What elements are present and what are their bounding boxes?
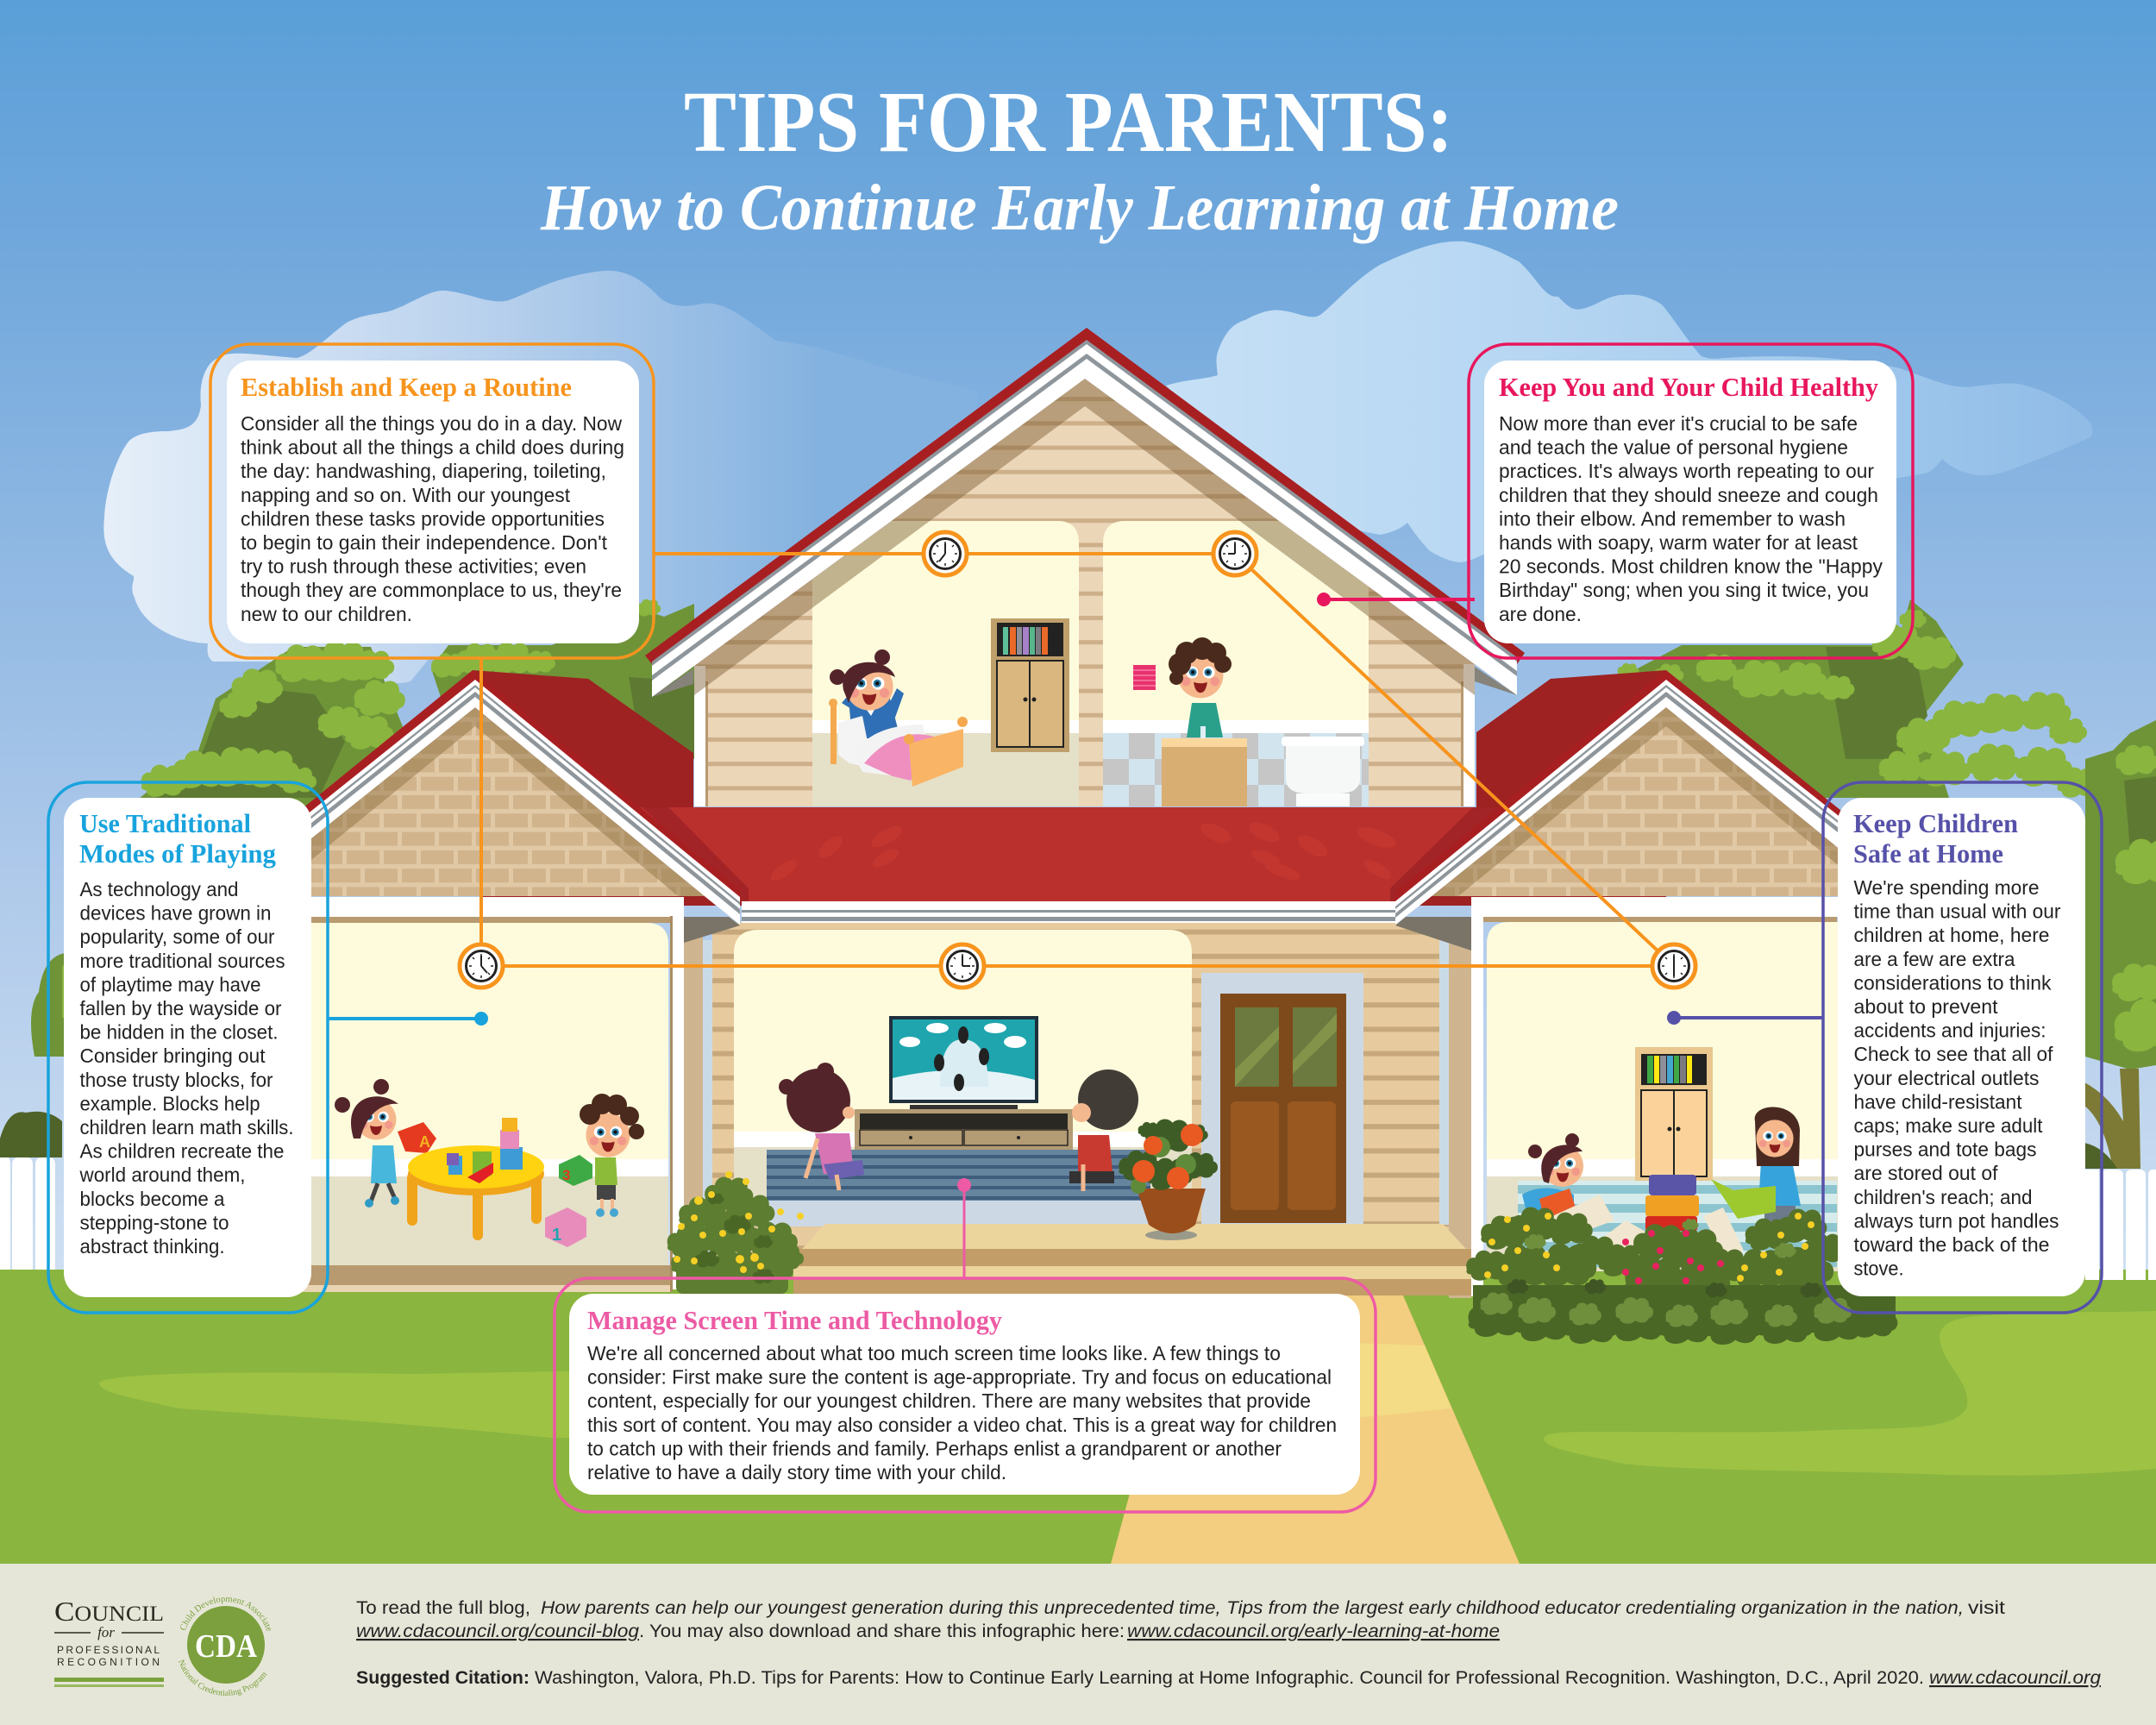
- block: letter A: A: [419, 1133, 430, 1151]
- cloud: left: [103, 271, 979, 690]
- footer text: blog reference: visit: [1968, 1597, 2005, 1618]
- block: number 1: 1: [552, 1226, 561, 1245]
- room: bedroom: [812, 521, 1079, 806]
- toilet: [1282, 737, 1364, 806]
- body text: and teach the value of personal hygiene: [1499, 436, 1848, 459]
- body text: are a few are extra: [1854, 948, 2015, 970]
- block: number 3: [559, 1155, 592, 1186]
- body text: considerations to think: [1854, 971, 2052, 994]
- body text: into their elbow. And remember to wash: [1499, 507, 1846, 530]
- body text: your electrical outlets: [1854, 1067, 2039, 1089]
- logo: CDA seal: [178, 1597, 271, 1696]
- central wall: [712, 923, 1471, 1272]
- reading room scene: [1522, 1047, 1801, 1264]
- logo: Council for Professional Recognition: for: [97, 1624, 115, 1640]
- sink cabinet: [1162, 738, 1247, 806]
- body text: world around them,: [79, 1164, 245, 1186]
- heading: Keep You and Your Child Healthy: [1499, 372, 1878, 402]
- body text: have child-resistant: [1854, 1090, 2022, 1113]
- gable shadows on the roof: [642, 807, 1501, 901]
- body text: children that they should sneeze and cough: [1499, 484, 1878, 506]
- logo: Council for Professional Recognition: RECOGNITION: [57, 1656, 160, 1668]
- logo: Council for Professional Recognition: COUNCIL: [54, 1596, 164, 1627]
- play table: [408, 1118, 544, 1235]
- body text: caps; make sure adult: [1854, 1114, 2043, 1137]
- body text: devices have grown in: [79, 902, 271, 925]
- boy with block: [559, 1094, 644, 1217]
- logo: Council for Professional Recognition: PROFESSIONAL: [57, 1644, 160, 1656]
- far left background trees: [0, 953, 86, 1157]
- clock 3: [460, 944, 503, 988]
- siding wall: [694, 379, 1475, 806]
- girl watching TV: [779, 1063, 864, 1190]
- body text: hands with soapy, warm water for at least: [1499, 531, 1858, 554]
- sky background: [0, 0, 2156, 1285]
- fence: [0, 1157, 2156, 1280]
- trees behind the house: [0, 599, 2156, 1331]
- panel: Manage Screen Time and Technology: [555, 1278, 1376, 1512]
- body text: We're all concerned about what too much screen time looks like. A few things to: [587, 1342, 1281, 1364]
- connector: safe: [1667, 1011, 1823, 1025]
- heading: Safe at Home: [1853, 838, 2003, 869]
- body text: As technology and: [79, 878, 238, 900]
- left tree one: [129, 641, 440, 837]
- body text: those trusty blocks, for: [79, 1069, 273, 1091]
- block: number 1: [545, 1208, 586, 1247]
- front door: [1220, 994, 1346, 1223]
- footer text: citation: www.cdacouncil.org: [1929, 1667, 2101, 1688]
- boy watching TV: [1069, 1070, 1138, 1191]
- room: bathroom: [1103, 521, 1369, 806]
- body text: though they are commonplace to us, they're: [241, 579, 622, 601]
- body text: [1854, 876, 2061, 1280]
- body text: about to prevent: [1854, 995, 1998, 1018]
- trunks: [248, 1276, 1902, 1331]
- right post: [1439, 927, 1449, 1225]
- panel: Establish and Keep a Routine: [210, 344, 654, 658]
- porch steps: [793, 1224, 1471, 1295]
- rug: [767, 1150, 1150, 1201]
- body text: to begin to gain their independence. Don't: [241, 531, 608, 554]
- right tree three: [2084, 720, 2156, 1169]
- heading: Keep Children: [1853, 808, 2018, 838]
- title: TIPS FOR PARENTS:: [684, 73, 1453, 170]
- heading: Establish and Keep a Routine: [241, 372, 572, 402]
- TV stand: [855, 1109, 1073, 1150]
- heading: [1853, 808, 2018, 869]
- roof trim: [1395, 670, 1863, 901]
- body text: [241, 412, 624, 625]
- right tree two: [1879, 692, 2100, 798]
- body text: 20 seconds. Most children know the "Happy: [1499, 555, 1883, 578]
- lawn highlights: [99, 1311, 2156, 1476]
- footer text: blog reference: www.cdacouncil.org/early-learning-at-home: [1127, 1621, 1500, 1641]
- body text: As children recreate the: [79, 1140, 285, 1163]
- block: number 3: 3: [562, 1167, 570, 1183]
- heading: [79, 808, 276, 869]
- panel: Keep You and Your Child Healthy: [1469, 344, 1913, 658]
- stack of books: [1645, 1175, 1699, 1231]
- body text: the day: handwashing, diapering, toileting,: [241, 460, 606, 482]
- ground floor: [302, 897, 1842, 1298]
- clock 5: [1652, 944, 1695, 988]
- panel: Use Traditional Modes of Playing: [48, 782, 328, 1313]
- body text: Now more than ever it's crucial to be safe: [1499, 412, 1858, 435]
- body text: consider: First make sure the content is age-appropriate. Try and focus on educational: [587, 1366, 1332, 1389]
- footer text: blog reference: . You may also download and share this infographic here:: [639, 1621, 1125, 1641]
- body text: [79, 878, 293, 1258]
- connector: routine clocks (orange): [460, 532, 1695, 988]
- body text: are done.: [1499, 603, 1582, 625]
- body text: purses and tote bags: [1854, 1138, 2037, 1161]
- body text: content, especially for our youngest children. There are many websites that provide: [587, 1389, 1311, 1412]
- heading: Manage Screen Time and Technology: [587, 1305, 1002, 1335]
- bed and girl: [829, 649, 968, 787]
- body text: Birthday" song; when you sing it twice, you: [1499, 579, 1869, 601]
- mother reading: [1711, 1107, 1801, 1242]
- bushes: right garden: [1466, 1207, 1897, 1345]
- brick wall: [1432, 707, 1846, 896]
- connector: healthy: [1317, 593, 1475, 606]
- roof trim: [293, 670, 740, 901]
- left wing wall: [302, 897, 681, 1292]
- left wing gable: [293, 670, 740, 925]
- body text: children's reach; and: [1854, 1186, 2032, 1208]
- body text: [587, 1342, 1337, 1484]
- left playroom scene: [335, 1079, 644, 1247]
- panel: Keep Children Safe at Home: [1823, 782, 2102, 1313]
- footer band: [0, 1564, 2156, 1725]
- heading: Use Traditional: [79, 808, 251, 838]
- clock 1: [924, 532, 967, 575]
- body text: new to our children.: [241, 603, 412, 625]
- body text: abstract thinking.: [79, 1235, 224, 1258]
- body text: of playtime may have: [79, 973, 260, 995]
- cloud: right: [1166, 242, 2093, 562]
- body text: Check to see that all of: [1854, 1043, 2053, 1065]
- body text: example. Blocks help: [79, 1092, 260, 1114]
- body text: time than usual with our: [1854, 900, 2061, 923]
- clock 4: [941, 944, 984, 988]
- roof shadow over top storey: [694, 379, 1475, 695]
- door frame: [1201, 973, 1363, 1224]
- eave shadows: [652, 667, 1517, 697]
- main red roof: [639, 807, 1501, 923]
- body text: always turn pot handles: [1854, 1209, 2059, 1232]
- white wall edges: [694, 664, 1475, 806]
- body text: practices. It's always worth repeating to our: [1499, 460, 1874, 482]
- body text: stove.: [1854, 1258, 1904, 1280]
- connector: screen time: [957, 1178, 971, 1278]
- body text: Consider all the things you do in a day. Now: [241, 412, 622, 435]
- bush: porch left: [667, 1171, 804, 1294]
- upper storey: [645, 328, 1525, 806]
- logo: Council for Professional Recognition: [54, 1596, 164, 1687]
- brick wall: [298, 707, 705, 896]
- body text: blocks become a: [79, 1188, 225, 1210]
- body text: accidents and injuries:: [1854, 1019, 2046, 1042]
- back roofs of side wings: [473, 670, 1666, 906]
- body text: try to rush through these activities; even: [241, 555, 586, 578]
- right tree one: [1618, 599, 1964, 798]
- grass lawn: [0, 1270, 2156, 1567]
- left post: [673, 897, 684, 1289]
- shadow on brick: [298, 707, 705, 896]
- closet: [991, 618, 1069, 752]
- footer text: blog reference: How parents can help our youngest generation during this unprecedented time, Tips from the largest early childhood educator credentialing organization in the nation,: [541, 1597, 1964, 1618]
- body text: more traditional sources: [79, 950, 285, 972]
- closet: [1635, 1047, 1713, 1181]
- body text: napping and so on. With our youngest: [241, 484, 571, 506]
- right wing gable: [1395, 670, 1863, 925]
- body text: children at home, here: [1854, 924, 2049, 946]
- footer text: blog reference: www.cdacouncil.org/council-blog: [356, 1621, 639, 1641]
- logo: CDA seal: Child Development Associate®: [180, 1597, 271, 1632]
- body text: children learn math skills.: [79, 1116, 293, 1138]
- girl with block: [335, 1079, 436, 1208]
- left tree two: [431, 599, 694, 759]
- living room: [734, 930, 1192, 1226]
- subtitle: How to Continue Early Learning at Home: [540, 172, 1619, 244]
- television: [889, 1016, 1038, 1109]
- body text: to catch up with their friends and family. Perhaps enlist a grandparent or another: [587, 1437, 1282, 1459]
- footer text: citation: Suggested Citation:: [356, 1667, 530, 1688]
- body text: this sort of content. You may also consider a video chat. This is a great way for children: [587, 1414, 1337, 1436]
- logo: CDA seal: National Credentialing Program: [178, 1659, 267, 1696]
- garden path: [1111, 1295, 1520, 1564]
- body text: relative to have a daily story time with your child.: [587, 1461, 1006, 1484]
- logo: CDA seal: CDA: [195, 1628, 257, 1665]
- heading: Modes of Playing: [79, 838, 276, 869]
- lower eave shadows: [684, 917, 1471, 950]
- body text: stepping-stone to: [79, 1211, 229, 1233]
- body text: We're spending more: [1854, 876, 2039, 899]
- footer text: blog reference: To read the full blog,: [356, 1597, 530, 1618]
- body text: children these tasks provide opportunities: [241, 507, 605, 530]
- shadow on brick: [1432, 707, 1846, 896]
- footer text: blog reference: [356, 1597, 2005, 1641]
- clock 2: [1213, 532, 1257, 575]
- block: letter A: [398, 1122, 436, 1153]
- boy washing hands: [1169, 637, 1232, 742]
- body text: be hidden in the closet.: [79, 1021, 278, 1044]
- footer text: citation: Washington, Valora, Ph.D. Tips for Parents: How to Continue Early Learning at Home Infographic. Council for Professional Recognition. Washington, D.C., April 2020.: [535, 1667, 1924, 1688]
- body text: toward the back of the: [1854, 1233, 2049, 1256]
- girl lying down: [1522, 1133, 1583, 1218]
- path highlight: [1250, 1343, 1451, 1423]
- towel: [1133, 665, 1156, 690]
- body text: [1499, 412, 1883, 625]
- gable roof trim: [645, 328, 1525, 697]
- body text: are stored out of: [1854, 1162, 1998, 1184]
- body text: Consider bringing out: [79, 1044, 266, 1067]
- body text: popularity, some of our: [79, 925, 275, 948]
- body text: fallen by the wayside or: [79, 997, 282, 1019]
- connector: playing: [328, 1012, 488, 1026]
- open books: [1552, 1195, 1744, 1264]
- potted plant: [1119, 1119, 1218, 1240]
- body text: think about all the things a child does during: [241, 436, 624, 459]
- right wing wall: [1471, 897, 1842, 1296]
